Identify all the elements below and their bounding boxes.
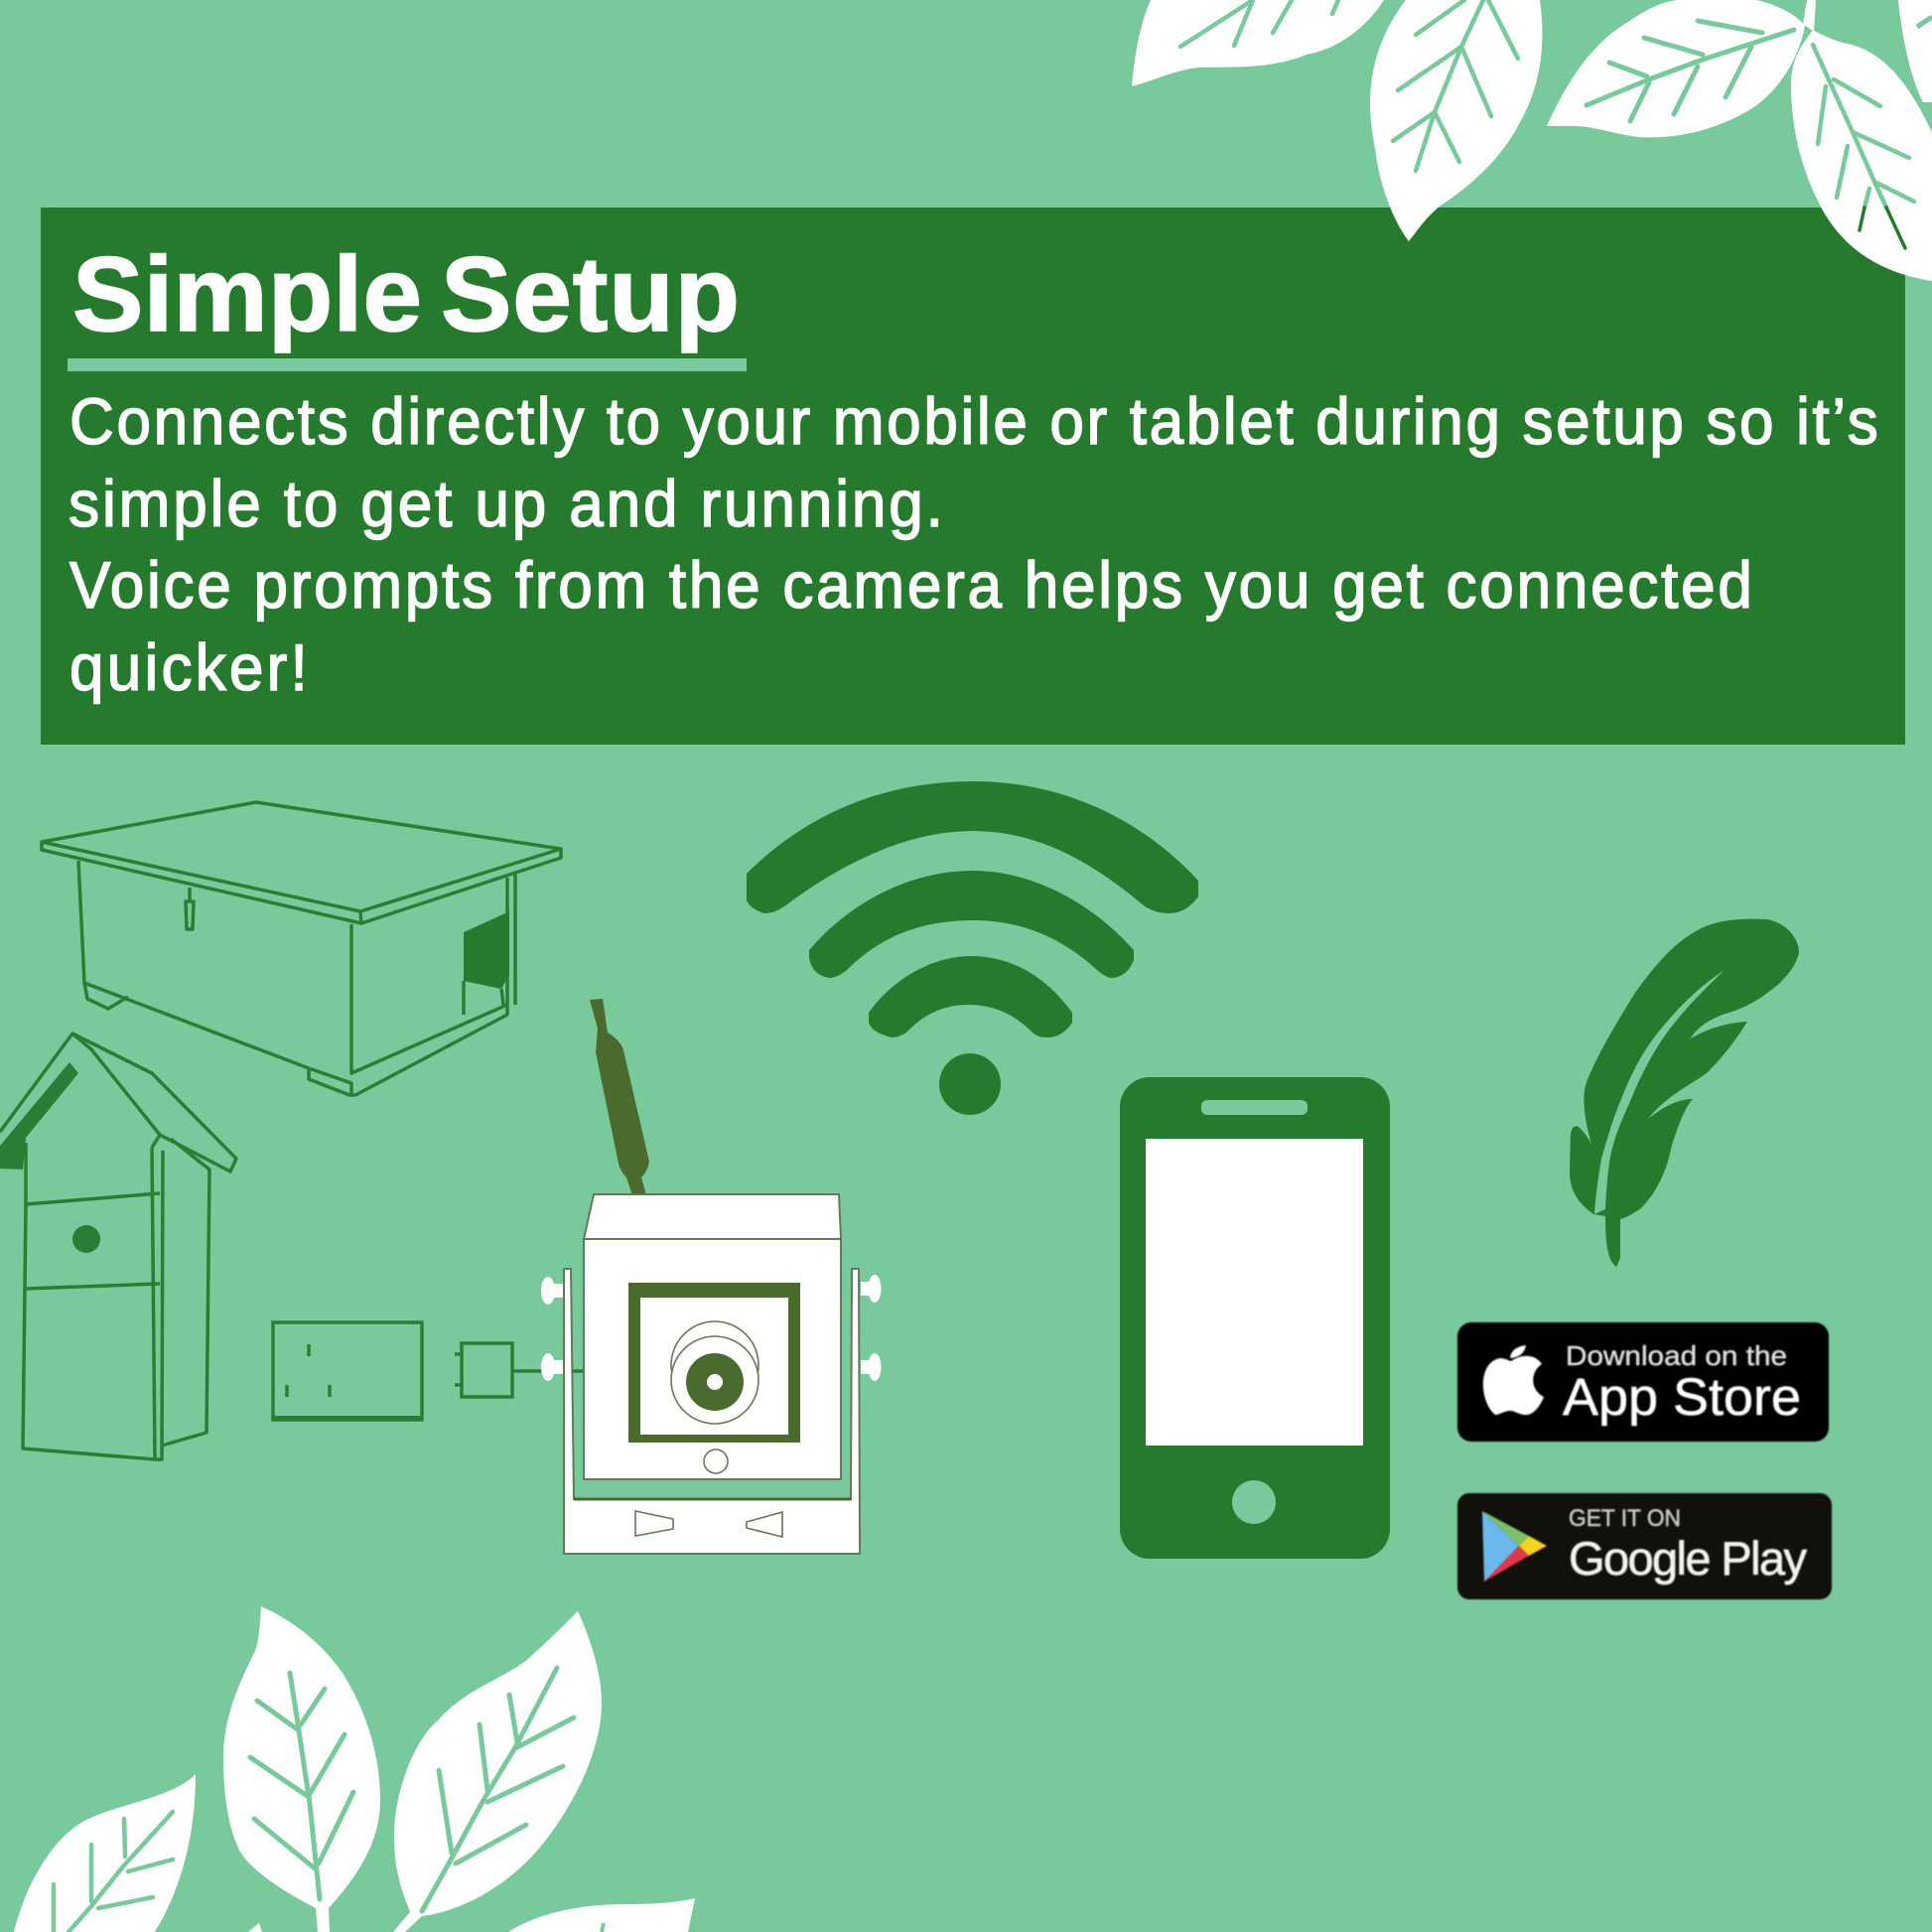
camera body	[584, 1239, 841, 1479]
badge: app store: Download on the	[1566, 1340, 1787, 1371]
box door	[464, 911, 509, 989]
bottom-left leaves	[14, 1606, 695, 1932]
body text	[69, 384, 1878, 704]
body text: quicker!	[69, 630, 308, 704]
camera mount knobs	[541, 1275, 882, 1381]
body text: simple to get up and running.	[69, 467, 943, 540]
body text: Connects directly to your mobile or tablet during setup so it’s	[69, 384, 1878, 458]
camera lens	[671, 1321, 759, 1473]
badge: app store	[1457, 1322, 1829, 1442]
icon: phone	[1120, 1077, 1390, 1559]
leaf: bottom edge tip	[248, 1923, 262, 1932]
phone speaker	[1201, 1100, 1308, 1115]
camera hood	[584, 1194, 841, 1239]
leaf: far right	[1791, 30, 1932, 281]
leaf: centre	[223, 1606, 380, 1932]
heading: Setup	[441, 234, 740, 353]
heading underline	[68, 358, 747, 371]
leaf: top centre	[1370, 0, 1542, 241]
camera sensors	[635, 1511, 782, 1537]
icon: wifi	[747, 781, 1198, 1115]
phone home button	[1232, 1480, 1276, 1524]
illustration: bird box	[0, 1034, 236, 1459]
play logo	[1482, 1511, 1547, 1582]
wall socket	[272, 1322, 423, 1421]
heading: Simple	[72, 234, 422, 353]
leaf stem	[1803, 0, 1816, 32]
camera lens frame	[628, 1283, 800, 1443]
badge: app store: App Store	[1563, 1368, 1801, 1427]
box latch	[186, 888, 194, 929]
badge: google play	[1457, 1493, 1832, 1599]
leaf: right	[393, 1611, 602, 1932]
phone screen	[1146, 1139, 1363, 1446]
panel: simple setup	[41, 207, 1905, 745]
power adapter and cable	[455, 1343, 586, 1397]
camera bracket	[564, 1269, 860, 1554]
top-right leaves	[1132, 0, 1932, 281]
camera antenna	[590, 999, 649, 1195]
icon: feather	[1570, 919, 1799, 1267]
badge: google play: Google Play	[1569, 1532, 1807, 1585]
leaf: corner	[1898, 0, 1932, 102]
leaf: top left	[1132, 0, 1384, 86]
illustration: hedgehog box	[42, 802, 561, 1095]
apple logo	[1483, 1345, 1544, 1415]
heading	[72, 234, 740, 353]
leaf: bottom edge right	[508, 1898, 695, 1932]
leaf: lower left	[14, 1774, 196, 1932]
badge: google play: GET IT ON	[1569, 1505, 1681, 1532]
camera	[541, 1194, 882, 1554]
body text: Voice prompts from the camera helps you get connected	[69, 548, 1752, 621]
leaf: top right	[1547, 0, 1805, 137]
bird box hole	[72, 1225, 100, 1253]
